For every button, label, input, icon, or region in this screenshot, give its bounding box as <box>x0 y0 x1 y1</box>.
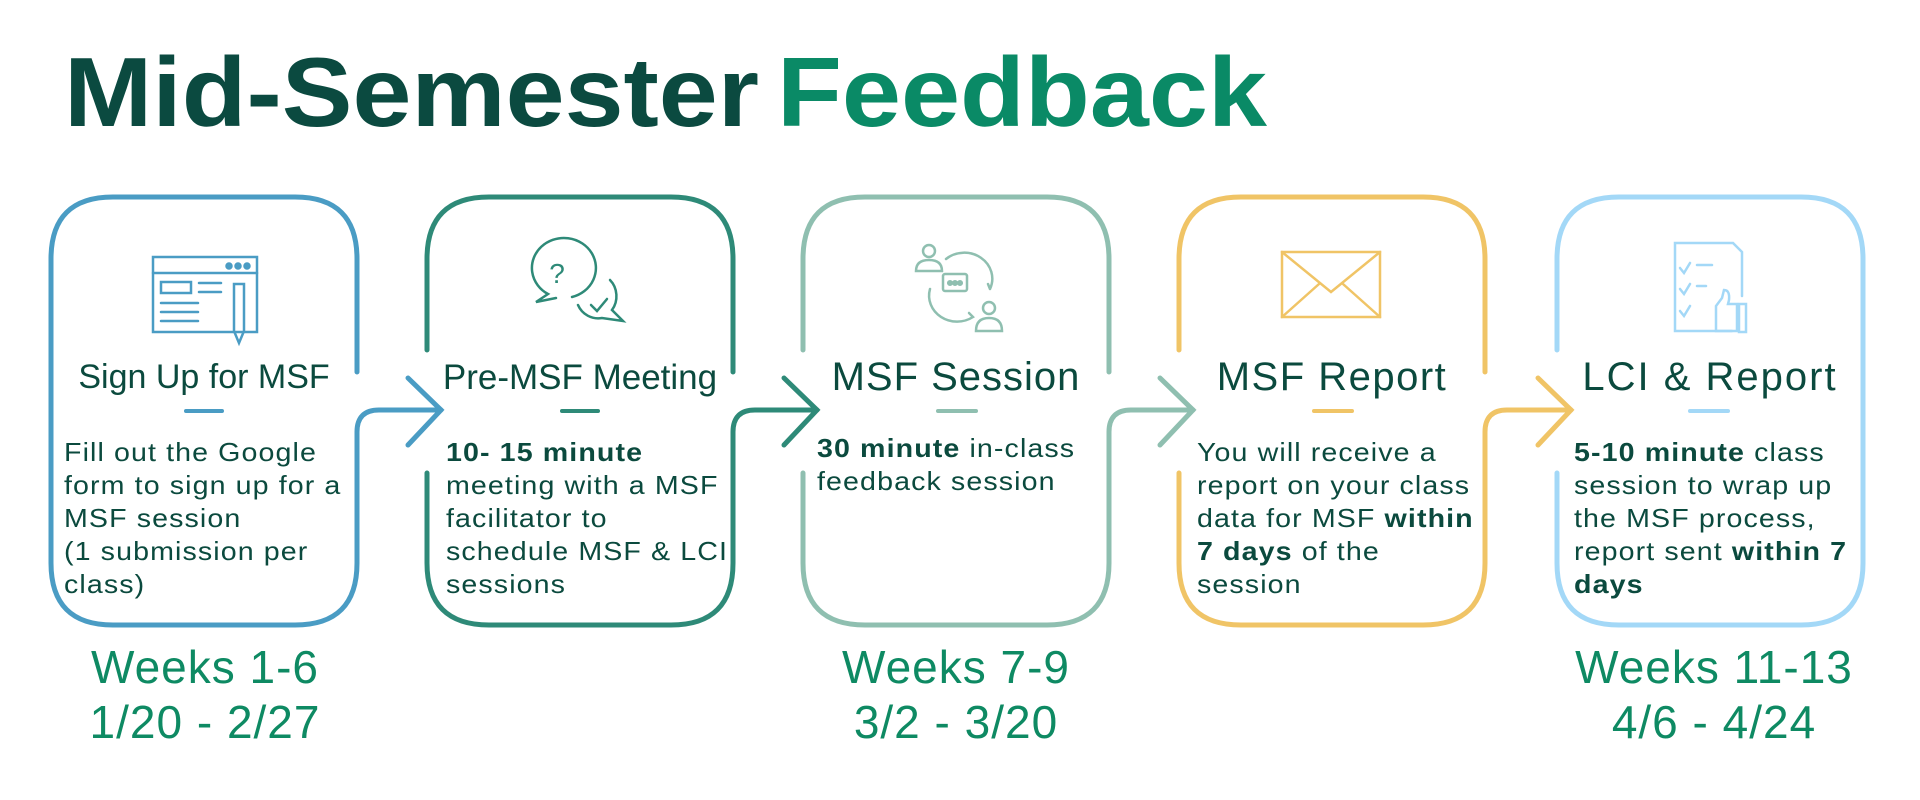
text: session: 30 minute in-class <box>817 433 1075 463</box>
icon: question speech bubbles: ? <box>549 258 565 289</box>
text: pre-msf: schedule MSF & LCI <box>446 536 728 566</box>
text: pre-msf: 10- 15 minute <box>446 437 643 467</box>
text: pre-msf: meeting with a MSF <box>446 470 719 500</box>
text: sign up: MSF session <box>64 503 241 533</box>
title: Feedback <box>777 37 1268 147</box>
text: sign up: class) <box>64 569 145 599</box>
text: lci <box>1574 437 1847 599</box>
text: report: session <box>1197 569 1302 599</box>
text: sign up: (1 submission per <box>64 536 308 566</box>
weeks 1-6 <box>90 641 320 748</box>
text: lci: the MSF process, <box>1574 503 1816 533</box>
box 5 <box>1557 197 1863 625</box>
text: report: data for MSF within <box>1197 503 1474 533</box>
text: report: 7 days of the <box>1197 536 1380 566</box>
heading: MSF Session: MSF Session <box>832 355 1080 399</box>
text: report <box>1197 437 1474 599</box>
text: session <box>817 433 1075 496</box>
text: lci: report sent within 7 <box>1574 536 1847 566</box>
box 1 with arrow <box>51 197 441 625</box>
box 3 with arrow <box>803 197 1193 625</box>
icon: people conversation <box>916 245 1002 331</box>
heading: MSF Report: MSF Report <box>1217 355 1447 399</box>
heading: Pre-MSF Meeting: Pre-MSF Meeting <box>443 358 717 397</box>
text: sign up: form to sign up for a <box>64 470 341 500</box>
weeks 1-6: Weeks 1-6 <box>91 641 319 693</box>
icon: envelope <box>1282 252 1380 317</box>
title: Mid-Semester <box>64 37 759 147</box>
box 2 with arrow <box>427 197 817 625</box>
text: lci: 5-10 minute class <box>1574 437 1825 467</box>
weeks 7-9: Weeks 7-9 <box>842 641 1070 693</box>
title <box>64 37 1268 147</box>
weeks 7-9 <box>842 641 1070 748</box>
weeks 11-13: 4/6 - 4/24 <box>1612 696 1816 748</box>
text: sign up <box>64 437 341 599</box>
text: pre-msf <box>446 437 728 599</box>
text: session: feedback session <box>817 466 1056 496</box>
icon: question speech bubbles <box>532 238 623 321</box>
heading: LCI & Report: LCI & Report <box>1582 355 1838 399</box>
weeks 7-9: 3/2 - 3/20 <box>854 696 1058 748</box>
icon: web form <box>153 257 257 343</box>
text: report: You will receive a <box>1197 437 1437 467</box>
weeks 1-6: 1/20 - 2/27 <box>90 696 320 748</box>
weeks 11-13: Weeks 11-13 <box>1575 641 1853 693</box>
icon: checklist with thumbs up <box>1675 243 1746 332</box>
box 4 with arrow <box>1179 197 1571 625</box>
text: lci: days <box>1574 569 1644 599</box>
heading: Sign Up for MSF: Sign Up for MSF <box>78 358 330 396</box>
text: sign up: Fill out the Google <box>64 437 317 467</box>
text: report: report on your class <box>1197 470 1470 500</box>
text: lci: session to wrap up <box>1574 470 1832 500</box>
weeks 11-13 <box>1575 641 1853 748</box>
underline dashes <box>186 409 1728 413</box>
text: pre-msf: facilitator to <box>446 503 608 533</box>
text: pre-msf: sessions <box>446 569 566 599</box>
